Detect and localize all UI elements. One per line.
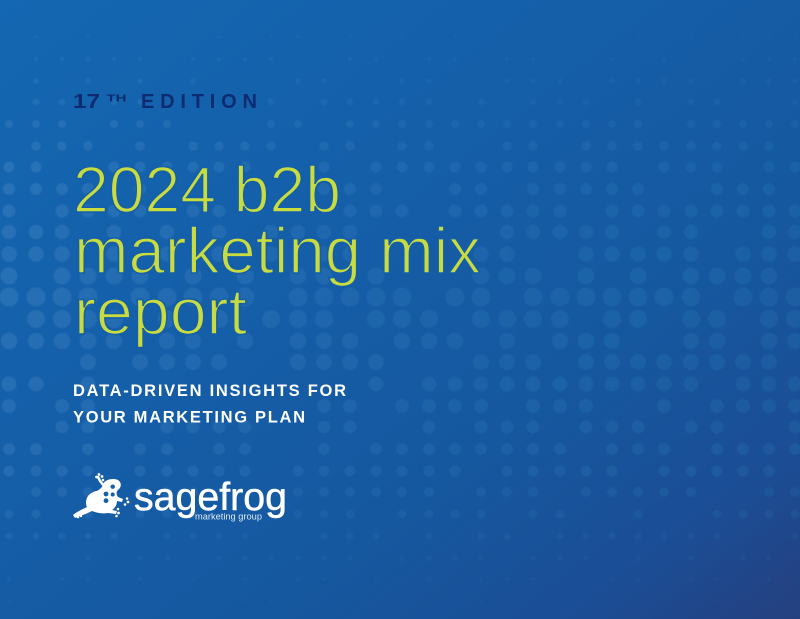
- title: marketing mix: [74, 214, 481, 287]
- logo tagline: marketing group: [195, 512, 262, 522]
- title: [73, 153, 481, 348]
- title: report: [74, 275, 247, 348]
- subtitle: DATA-DRIVEN INSIGHTS FOR: [73, 382, 346, 400]
- title: 2024 b2b: [73, 153, 341, 226]
- edition label: 17: [73, 91, 100, 113]
- edition label: [73, 91, 257, 113]
- edition label: EDITION: [141, 91, 257, 113]
- subtitle: [73, 382, 346, 426]
- subtitle: YOUR MARKETING PLAN: [73, 408, 305, 426]
- logo wordmark: sagefrog: [134, 476, 287, 519]
- icon: frog: [73, 473, 129, 518]
- sagefrog logo: [73, 473, 287, 522]
- edition label: TH: [106, 92, 126, 104]
